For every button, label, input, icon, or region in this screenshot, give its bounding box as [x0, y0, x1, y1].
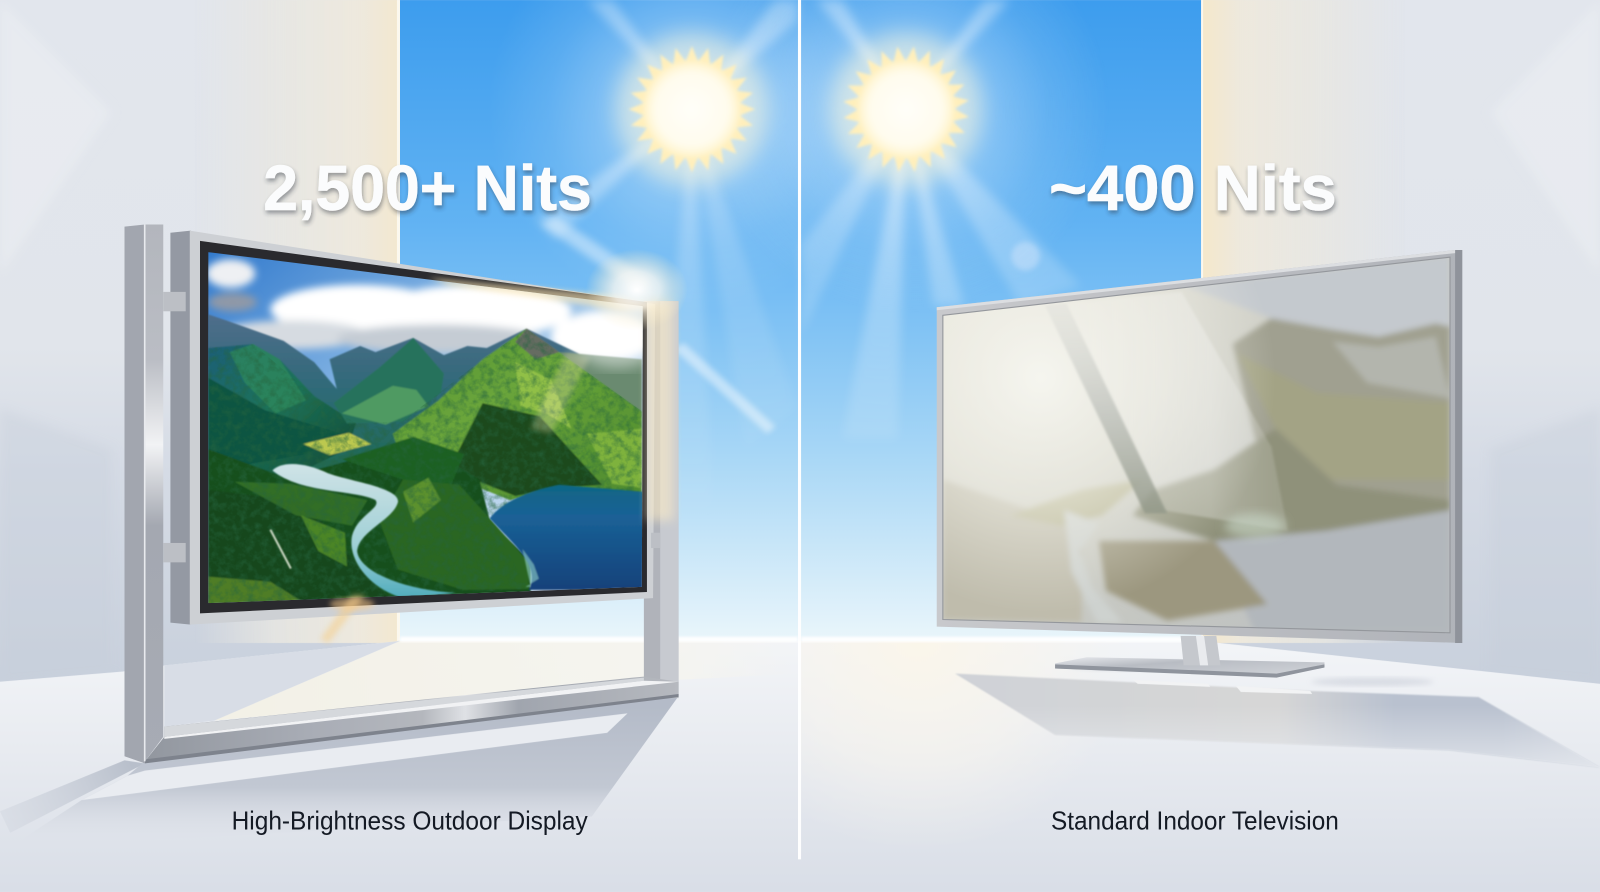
center mountain — [334, 338, 444, 424]
floor shadow: indoor television — [955, 660, 1600, 767]
forest texture — [208, 327, 647, 607]
caption: High-Brightness Outdoor Display: High-Brightness Outdoor Display — [232, 808, 588, 836]
caption: Standard Indoor Television: Standard Indoor Television — [1051, 808, 1339, 836]
icon: left sun — [615, 33, 768, 186]
screen edge — [943, 257, 1450, 633]
sun rays: left — [488, 0, 896, 510]
glare sheen — [1156, 294, 1287, 530]
indoor television on stand — [937, 250, 1462, 678]
lens flare and edge glow — [320, 249, 688, 643]
river — [272, 464, 456, 598]
valley meadow and lower forest — [208, 449, 531, 607]
stand: neck and base — [1055, 636, 1324, 678]
heading: 2,500+ Nits: 2,500+ Nits — [263, 152, 592, 224]
lake — [490, 485, 645, 590]
icon: right sun — [821, 24, 991, 195]
big right mountain — [393, 329, 642, 500]
light shaft on mountain — [531, 352, 590, 434]
far mountains — [208, 314, 642, 480]
reflected dark strip — [1045, 303, 1167, 513]
heading: ~400 Nits: ~400 Nits — [1049, 152, 1337, 224]
stand: metal frame — [124, 225, 679, 763]
screen: washed-out landscape under glare — [939, 255, 1454, 638]
screen: mountain valley landscape — [206, 245, 663, 612]
divider — [798, 0, 801, 859]
floor shadow: outdoor display — [0, 641, 679, 847]
clouds — [206, 259, 653, 361]
sun rays: right — [702, 0, 1110, 439]
panel: display bezel — [163, 231, 660, 625]
panel: television frame — [937, 250, 1462, 643]
left mountain — [208, 344, 356, 480]
outdoor display on metal frame stand — [124, 225, 688, 763]
